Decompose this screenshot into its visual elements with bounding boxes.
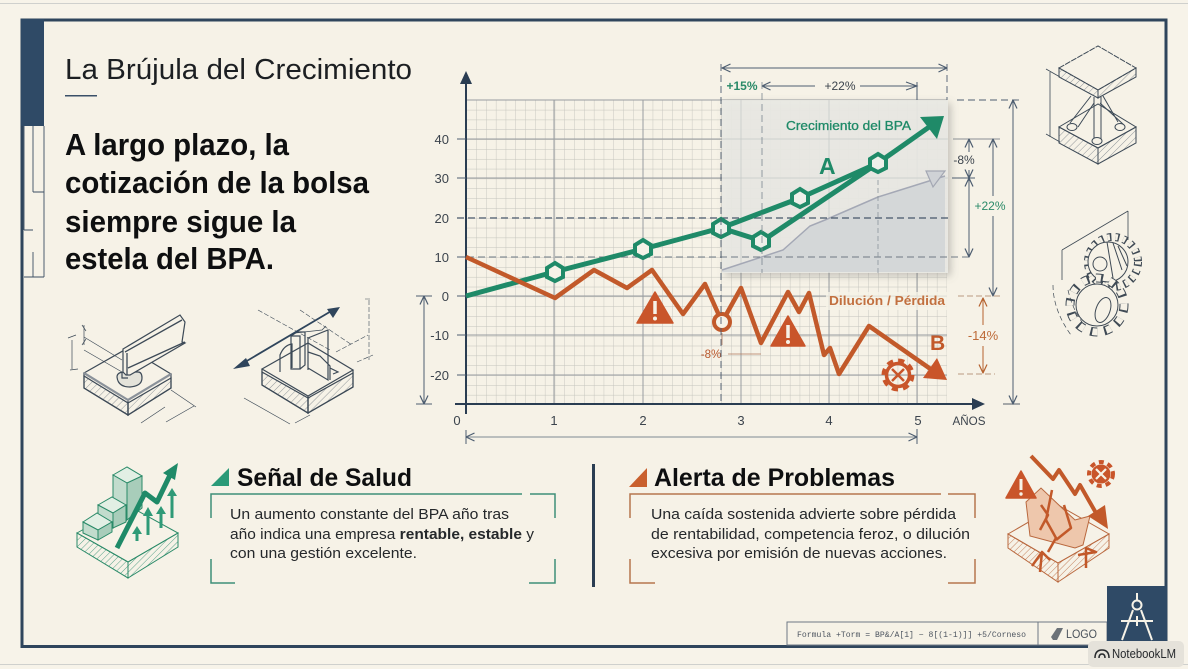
green line series xyxy=(466,116,944,296)
footer formula box xyxy=(787,622,1107,645)
x axis labels xyxy=(453,413,986,428)
x axis labels: AÑOS xyxy=(952,414,986,428)
y axis labels xyxy=(430,132,449,383)
NotebookLM badge: NotebookLM xyxy=(1112,647,1176,661)
icon: compass badge xyxy=(1107,586,1167,646)
dimension lines: top xyxy=(721,64,947,404)
headline xyxy=(65,127,370,276)
logo xyxy=(1051,627,1097,641)
orange line series xyxy=(466,257,947,380)
title underline xyxy=(65,95,97,96)
x axis labels: 2 xyxy=(639,413,647,428)
icon: warning 2 xyxy=(771,316,805,346)
corner title block strip xyxy=(21,19,44,277)
bracket frame xyxy=(211,494,555,583)
body text xyxy=(230,507,535,562)
y axis labels: 10 xyxy=(435,250,449,265)
dimension lines: bottom and left xyxy=(416,296,917,444)
body text: excesiva por emisión de nuevas acciones. xyxy=(651,546,947,562)
y axis labels: 20 xyxy=(435,211,449,226)
icon: dual arrow over bracket xyxy=(233,307,340,369)
label: -8% point xyxy=(701,333,761,361)
dimension lines: right: +22% xyxy=(974,199,1006,213)
y axis labels: -20 xyxy=(430,368,449,383)
highlighted zoom panel xyxy=(722,100,948,273)
marker: grey triangle xyxy=(926,171,945,187)
sketch: isometric table xyxy=(1046,46,1136,164)
heading: Señal de Salud: Señal de Salud xyxy=(237,464,412,492)
y axis labels: -10 xyxy=(430,328,449,343)
y axis labels: 0 xyxy=(442,289,449,304)
icon: green corner triangle xyxy=(211,468,229,486)
panel: Alerta de Problemas xyxy=(629,464,975,583)
body text xyxy=(651,507,970,562)
body text: Un aumento constante del BPA año tras xyxy=(230,507,509,523)
NotebookLM badge xyxy=(1088,641,1184,667)
dimension lines: top: +15% xyxy=(726,79,758,93)
body text: año indica una empresa rentable, estable y xyxy=(230,527,535,543)
icon: orange corner triangle xyxy=(629,468,647,487)
body text: Una caída sostenida advierte sobre pérdida xyxy=(651,507,957,523)
title: La Brújula del Crecimiento xyxy=(65,54,412,86)
panel: Señal de Salud xyxy=(211,464,555,583)
icon: warning 1 xyxy=(637,292,673,323)
chart xyxy=(430,71,986,428)
bracket frame xyxy=(630,494,975,583)
y axis labels: 30 xyxy=(435,171,449,186)
icon: healthy growth block xyxy=(77,463,178,578)
body text: con una gestión excelente. xyxy=(230,546,417,562)
body text: de rentabilidad, competencia feroz, o dilución xyxy=(651,527,970,543)
icon: cracked block with falling arrow xyxy=(1006,456,1113,582)
headline: A largo plazo, la xyxy=(65,127,290,162)
dimension: -14% xyxy=(958,296,1000,374)
dimension lines: right: -8% xyxy=(953,153,975,167)
label: -8% point: -8% xyxy=(701,349,721,361)
benchmark dashed lines xyxy=(457,180,972,273)
icon: gear with cross xyxy=(884,361,912,389)
x axis labels: 3 xyxy=(737,413,745,428)
label: Crecimiento del BPA: Crecimiento del BPA xyxy=(786,119,912,133)
formula text: Formula +Torm = BP&/A[1] − 8[(1-1)]] +5/Corneso xyxy=(797,631,1026,640)
sketch: bracket on footing xyxy=(244,299,373,424)
x axis labels: 0 xyxy=(453,413,461,428)
x axis labels: 4 xyxy=(825,413,833,428)
sketch: beam on footing xyxy=(68,315,196,423)
chart grid xyxy=(466,100,947,404)
x axis labels: 1 xyxy=(550,413,558,428)
dimension lines: top: +22% xyxy=(824,79,856,93)
heading: Alerta de Problemas: Alerta de Problemas xyxy=(654,464,895,492)
label: B: B xyxy=(930,332,945,355)
headline: cotización de la bolsa xyxy=(65,165,370,200)
dimension: -14%: -14% xyxy=(968,328,999,343)
logo: LOGO xyxy=(1066,627,1097,641)
headline: siempre sigue la xyxy=(65,204,297,239)
axes xyxy=(455,71,985,414)
dimension lines: right xyxy=(952,100,1020,404)
y axis labels: 40 xyxy=(435,132,449,147)
label: Dilución / Pérdida: Dilución / Pérdida xyxy=(829,293,946,308)
divider xyxy=(592,464,595,587)
headline: estela del BPA. xyxy=(65,241,274,276)
sketch: gears xyxy=(1053,211,1138,335)
x axis labels: 5 xyxy=(914,413,922,428)
label: A: A xyxy=(819,153,836,179)
